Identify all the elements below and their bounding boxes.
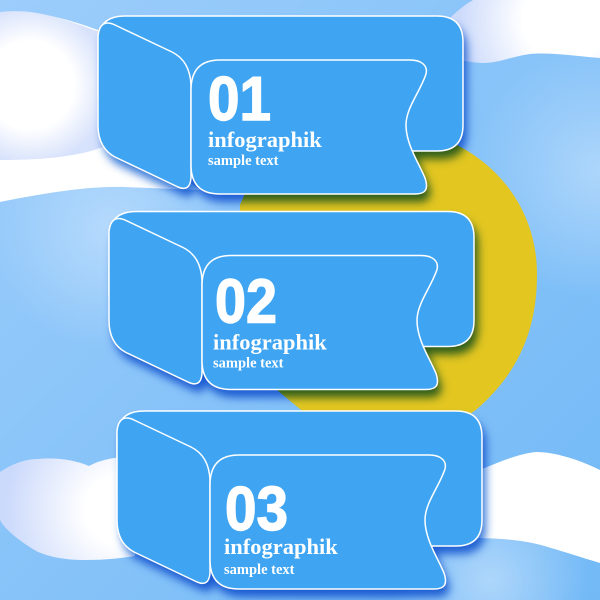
number 01: 01	[208, 65, 271, 134]
panel 01 side flap	[98, 23, 191, 188]
number 03: 03	[225, 475, 288, 544]
cloud: bottom left	[0, 456, 135, 560]
panel 03 shadow	[121, 419, 486, 597]
cloud: top right	[450, 0, 600, 63]
panel 03	[117, 411, 486, 597]
panel 03 front tag	[210, 455, 446, 589]
panel 01 back card	[98, 16, 463, 151]
panel 03 side flap	[117, 418, 210, 583]
cloud: top left	[0, 11, 200, 202]
sample text: sample text	[224, 562, 295, 578]
panel 03 back card	[117, 411, 482, 546]
panel 02 front tag	[202, 256, 438, 390]
panel 01 front tag	[191, 60, 427, 194]
heading: infographik	[224, 534, 338, 559]
panel 02 back card	[109, 212, 474, 346]
panel 02	[109, 212, 478, 398]
panel 01	[98, 16, 467, 202]
panel 02 side flap	[109, 219, 202, 384]
heading: infographik	[208, 127, 322, 152]
panel 02 shadow	[113, 220, 478, 398]
cloud: bottom right	[470, 452, 600, 563]
sample text: sample text	[213, 356, 284, 372]
number 02: 02	[215, 268, 277, 336]
heading: infographik	[213, 330, 327, 354]
sample text: sample text	[208, 153, 279, 169]
panel 01 shadow	[102, 24, 467, 202]
sun	[240, 128, 537, 428]
